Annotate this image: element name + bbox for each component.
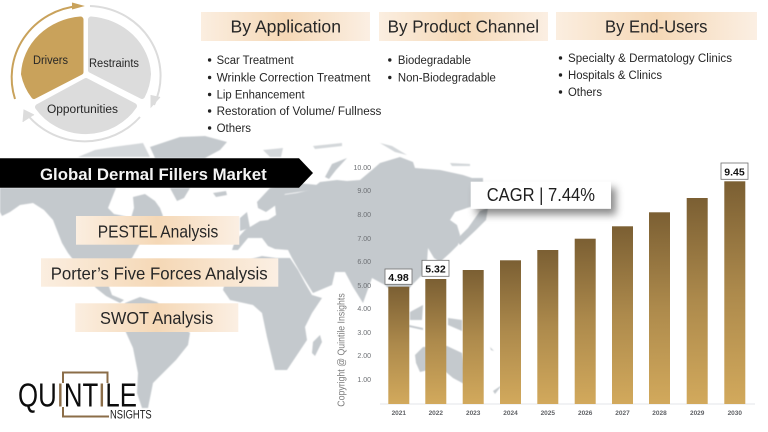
list: applications: Others bbox=[217, 123, 251, 135]
map: Indonesia bbox=[409, 305, 462, 331]
y axis labels: 4.00 bbox=[357, 306, 371, 313]
list: product channels: Biodegradable bbox=[398, 55, 471, 67]
header: By Application bbox=[201, 12, 370, 41]
header: By Application: By Application bbox=[230, 17, 341, 37]
list: applications bbox=[208, 55, 382, 135]
x axis labels: 2022 bbox=[429, 410, 443, 417]
map: Arctic islands bbox=[78, 143, 150, 157]
map: North America bbox=[0, 188, 163, 303]
map: Africa bbox=[223, 256, 322, 370]
arrow: gray right bbox=[90, 6, 161, 107]
x axis labels bbox=[392, 410, 742, 417]
y axis labels: 8.00 bbox=[357, 212, 371, 219]
arrow: gold bbox=[12, 3, 83, 99]
cycle diagram bbox=[12, 3, 161, 141]
map: New Zealand bbox=[490, 347, 502, 394]
header: By End-Users bbox=[556, 12, 757, 40]
map: Eurasia bbox=[232, 157, 483, 303]
list: applications: Restoration of Volume/ Fullness bbox=[217, 106, 382, 118]
arrow: gray bottom bbox=[23, 110, 140, 141]
map: Scandinavia bbox=[257, 183, 318, 212]
y axis labels: 9.00 bbox=[357, 188, 371, 195]
value label: 9.45 bbox=[721, 163, 748, 179]
logo: Quintile Insights: NSIGHTS bbox=[110, 409, 152, 421]
header: By Product Channel: By Product Channel bbox=[388, 17, 539, 37]
list: applications: Scar Treatment bbox=[217, 55, 294, 67]
list: end users: Others bbox=[568, 87, 602, 99]
value label: 4.98: 4.98 bbox=[388, 272, 409, 284]
title banner bbox=[0, 158, 313, 188]
y axis labels bbox=[353, 165, 371, 384]
copyright note: Copyright @ Quintile Insights bbox=[336, 293, 348, 407]
segment: Opportunities: Opportunities bbox=[47, 104, 118, 116]
title banner: Global Dermal Fillers Market bbox=[40, 165, 267, 184]
callout: CAGR bbox=[471, 182, 611, 209]
list: end users: Hospitals & Clinics bbox=[568, 70, 662, 82]
tag: PESTEL Analysis bbox=[76, 216, 239, 245]
value label: 5.32: 5.32 bbox=[425, 264, 446, 276]
map: Australia bbox=[415, 346, 466, 385]
x axis labels: 2028 bbox=[652, 410, 667, 417]
x axis labels: 2024 bbox=[503, 410, 518, 417]
map: Arctic scatter bbox=[263, 143, 470, 166]
tag: PESTEL Analysis: PESTEL Analysis bbox=[98, 221, 219, 241]
segment: Drivers: Drivers bbox=[33, 55, 68, 67]
map: Iceland bbox=[213, 191, 227, 197]
list: product channels bbox=[388, 55, 496, 84]
list: end users: Specialty & Dermatology Clinics bbox=[568, 53, 732, 65]
header: By Product Channel bbox=[379, 12, 548, 41]
map: British Isles bbox=[240, 212, 250, 231]
bars bbox=[388, 181, 745, 404]
y axis labels: 3.00 bbox=[357, 330, 371, 337]
x axis labels: 2029 bbox=[690, 410, 705, 417]
value label: 4.98 bbox=[385, 269, 412, 284]
y axis labels: 5.00 bbox=[357, 283, 371, 290]
map: Novaya Zemlya bbox=[325, 158, 347, 179]
logo: Quintile Insights: QUINTILE bbox=[18, 377, 137, 414]
tag: SWOT Analysis: SWOT Analysis bbox=[100, 308, 214, 328]
world map bbox=[0, 136, 502, 408]
x axis labels: 2030 bbox=[728, 410, 742, 417]
value label: 5.32 bbox=[422, 260, 449, 276]
segment: Opportunities bbox=[38, 81, 134, 131]
map: Japan bbox=[456, 208, 488, 245]
segment: Restraints bbox=[89, 20, 148, 96]
segment: Drivers bbox=[24, 20, 80, 96]
x axis labels: 2023 bbox=[466, 410, 481, 417]
header: By End-Users: By End-Users bbox=[605, 17, 708, 37]
y axis labels: 10.00 bbox=[353, 165, 371, 172]
map: Madagascar bbox=[312, 335, 322, 356]
y axis labels: 6.00 bbox=[357, 259, 371, 266]
bar chart bbox=[353, 163, 755, 417]
segment: Restraints: Restraints bbox=[89, 58, 139, 70]
tag: Porter's Five Forces Analysis: Porter’s Five Forces Analysis bbox=[51, 263, 268, 283]
x axis labels: 2025 bbox=[541, 410, 555, 417]
value label: 9.45: 9.45 bbox=[724, 166, 745, 178]
callout: CAGR: CAGR | 7.44% bbox=[487, 185, 595, 205]
list: product channels: Non-Biodegradable bbox=[398, 72, 496, 84]
list: end users bbox=[559, 53, 732, 99]
tag: SWOT Analysis bbox=[75, 303, 238, 332]
tag: Porter's Five Forces Analysis bbox=[41, 258, 278, 287]
x axis labels: 2021 bbox=[392, 410, 406, 417]
y axis labels: 1.00 bbox=[357, 377, 371, 384]
y axis labels: 2.00 bbox=[357, 353, 371, 360]
map: South America bbox=[124, 297, 190, 408]
x axis labels: 2026 bbox=[578, 410, 593, 417]
x axis labels: 2027 bbox=[615, 410, 630, 417]
list: applications: Lip Enhancement bbox=[217, 90, 305, 102]
map: Greenland bbox=[150, 136, 227, 201]
y axis labels: 7.00 bbox=[357, 236, 371, 243]
axis line bbox=[380, 403, 755, 405]
list: applications: Wrinkle Correction Treatment bbox=[217, 72, 371, 84]
